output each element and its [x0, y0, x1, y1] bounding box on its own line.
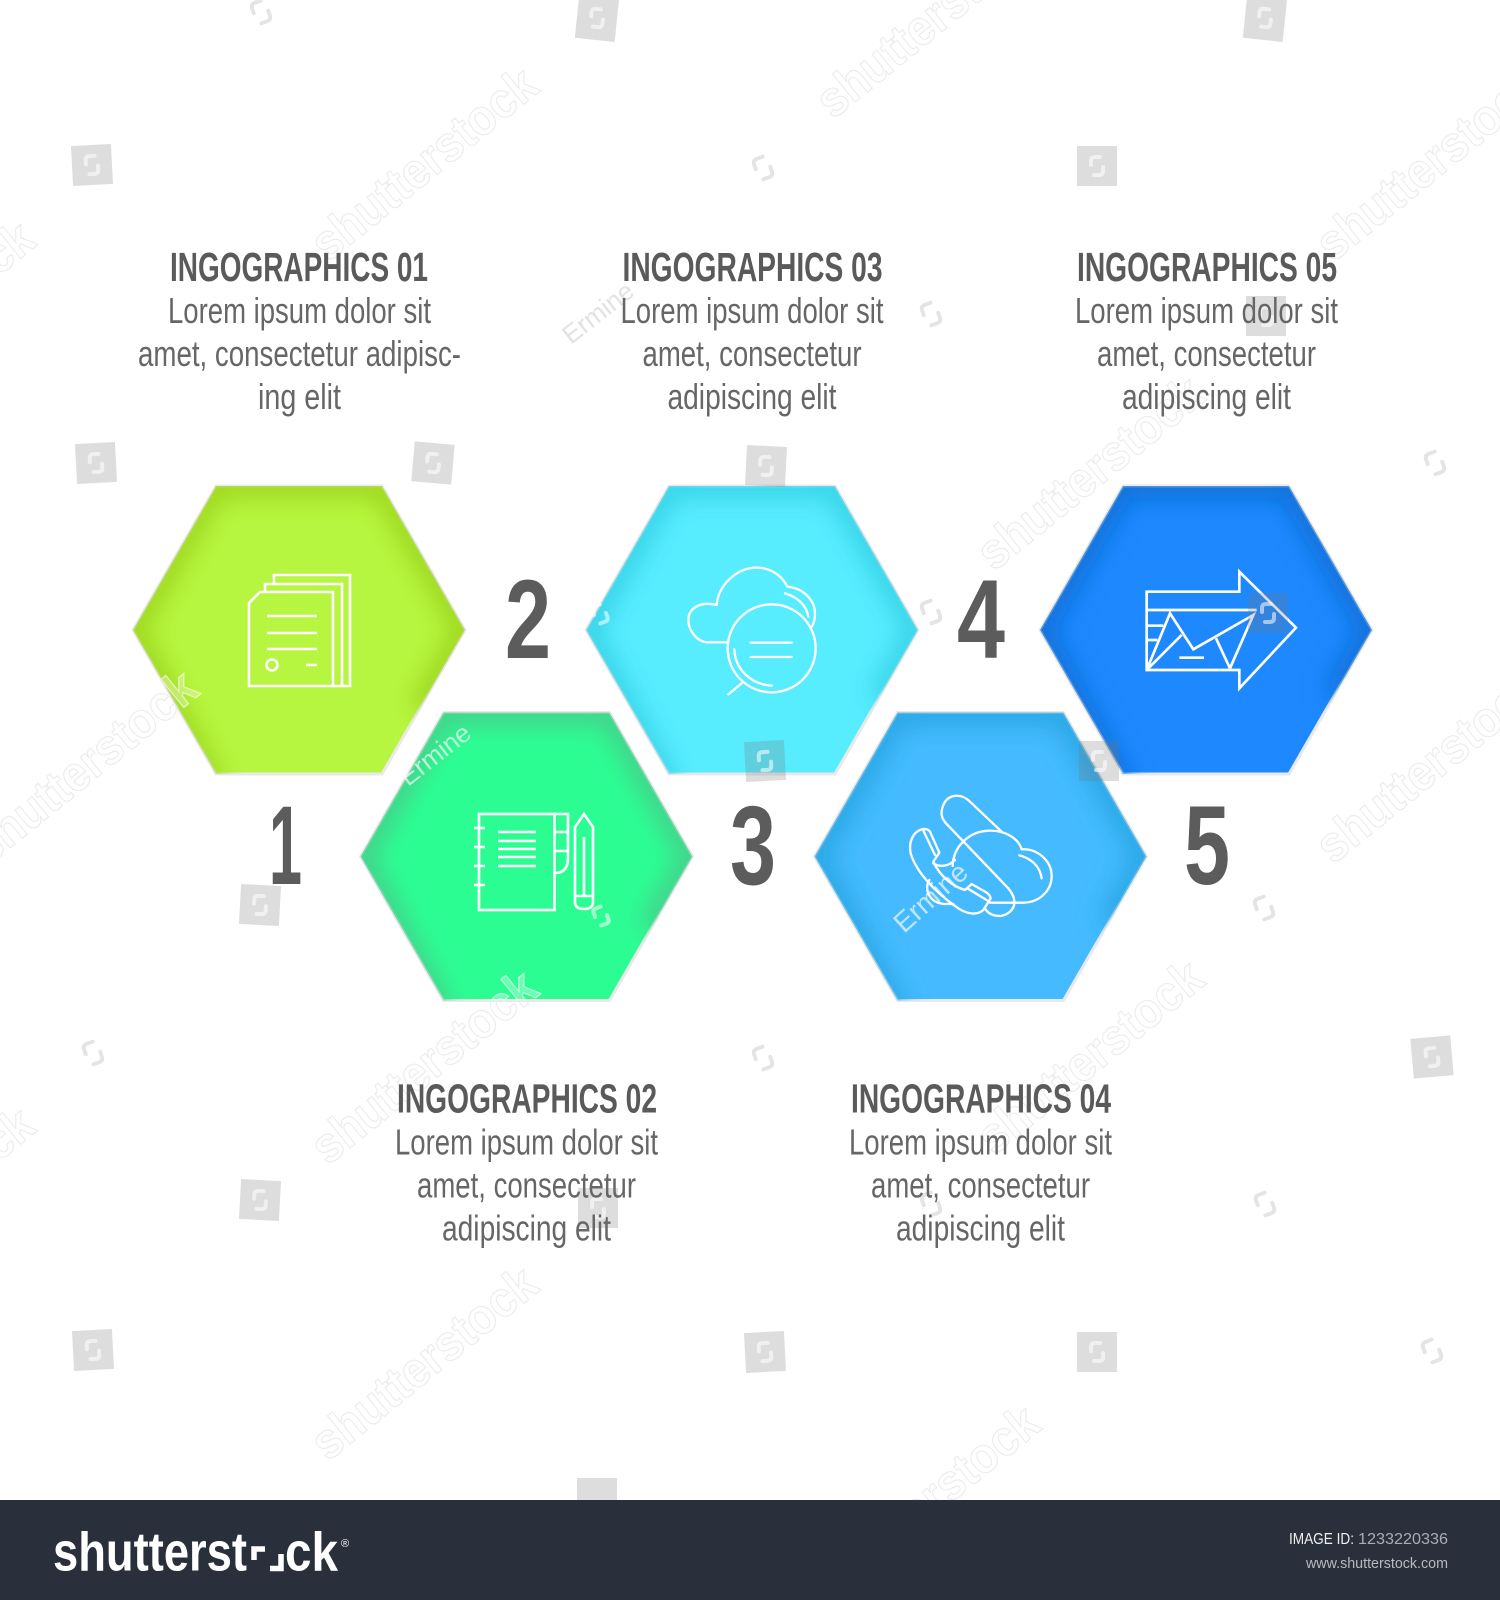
- watermark text on hexagon: Ermine: [887, 856, 974, 938]
- hexagon 4: sky blue with phone cloud icon: [814, 712, 1146, 1016]
- text block 1: [138, 244, 461, 417]
- number 3: 3: [730, 783, 776, 908]
- number 1: 1: [269, 783, 302, 908]
- text block 2: amet, consectetur: [417, 1164, 636, 1206]
- watermark: diagonal wordmarks behind content: shutterstock: [300, 1254, 548, 1471]
- icon: stacked documents: [249, 575, 350, 686]
- watermark: Ermine on green hexagon: Ermine: [393, 717, 477, 792]
- watermark: diagonal wordmarks behind content: Ermine: [556, 275, 640, 350]
- text block 4: Lorem ipsum dolor sit: [849, 1122, 1112, 1162]
- watermark: diagonal wordmarks behind content: shutterstock: [966, 364, 1214, 581]
- icon: handset, capsule and cloud: [910, 796, 1052, 916]
- hexagon 5: blue with mail arrow icon: [1040, 486, 1372, 790]
- text block 4: INGOGRAPHICS 04: [851, 1076, 1111, 1122]
- hexagon 2: green with notebook icon: [359, 711, 694, 1002]
- watermark: diagonal wordmarks behind content: shutterstock: [966, 948, 1214, 1165]
- text block 2: Lorem ipsum dolor sit: [395, 1122, 658, 1162]
- icon: envelope with arrow: [1147, 572, 1296, 688]
- footer logo: ck: [285, 1520, 338, 1582]
- text block 4: adipiscing elit: [896, 1208, 1065, 1248]
- text block 3: INGOGRAPHICS 03: [622, 244, 882, 290]
- footer bar: [0, 1500, 1500, 1600]
- watermark: diagonal wordmarks behind content: shutterstock: [300, 958, 548, 1175]
- text block 5: adipiscing elit: [1122, 376, 1291, 417]
- text block 5: Lorem ipsum dolor sit: [1075, 290, 1338, 331]
- text block 1: ing elit: [258, 376, 341, 417]
- website: www.shutterstock.com: [1305, 1555, 1448, 1572]
- icon: notebook and pencil: [474, 814, 593, 910]
- text block 2: adipiscing elit: [442, 1208, 611, 1248]
- text block 1: amet, consectetur adipisc-: [138, 333, 461, 374]
- watermark: diagonal wordmarks behind content: shutterstock: [300, 55, 548, 272]
- text block 2: INGOGRAPHICS 02: [397, 1076, 657, 1122]
- image id: [1289, 1531, 1448, 1548]
- image id: IMAGE ID:: [1289, 1531, 1354, 1548]
- number 2: 2: [505, 557, 551, 682]
- text block 5: INGOGRAPHICS 05: [1077, 244, 1337, 290]
- text block 3: amet, consectetur: [642, 333, 862, 374]
- footer logo: shutterst: [53, 1520, 247, 1582]
- text block 3: Lorem ipsum dolor sit: [620, 290, 884, 331]
- hexagon 3: cyan with cloud chat icon: [586, 486, 918, 790]
- text block 1: Lorem ipsum dolor sit: [168, 290, 431, 331]
- text block 3: [620, 244, 884, 417]
- text block 2: [395, 1076, 658, 1248]
- hexagon 2: green with notebook icon: shutterstock: [300, 958, 548, 1175]
- text block 3: adipiscing elit: [668, 376, 836, 417]
- footer logo: o: [252, 1520, 282, 1582]
- footer logo: ®: [341, 1538, 349, 1550]
- number 5: 5: [1184, 783, 1230, 908]
- text block 5: [1075, 244, 1338, 417]
- text block 4: amet, consectetur: [871, 1164, 1090, 1206]
- image id: 1233220336: [1358, 1531, 1448, 1548]
- text block 4: [849, 1076, 1112, 1248]
- hexagon 1: green-yellow with document icon: [132, 484, 466, 776]
- icon: cloud and speech bubble: [688, 568, 816, 694]
- text block 1: INGOGRAPHICS 01: [170, 244, 428, 290]
- text block 5: amet, consectetur: [1097, 333, 1316, 374]
- number 4: 4: [957, 557, 1005, 682]
